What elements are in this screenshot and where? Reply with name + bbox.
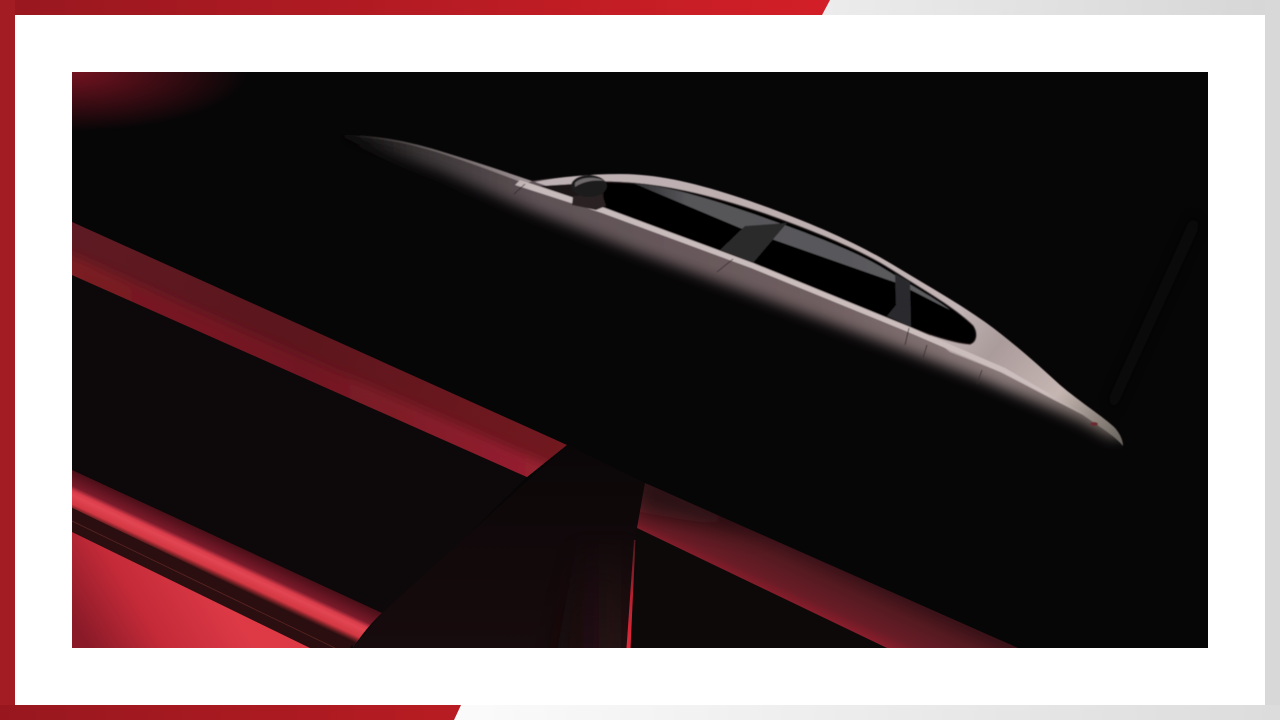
band shadow near pillar — [639, 483, 748, 537]
upper red band — [72, 222, 567, 477]
red floor — [72, 532, 310, 648]
belt line strip — [514, 180, 1049, 395]
central dark pillar — [354, 520, 638, 648]
window glass — [603, 182, 976, 344]
mirror stalk — [572, 194, 606, 210]
frame: top grey bar — [820, 0, 1280, 15]
roof rail — [535, 173, 961, 312]
lower left dark ledge — [72, 508, 353, 648]
frame: bottom grey bar — [450, 705, 1280, 720]
lower right red band — [637, 483, 1018, 648]
frame: right grey bar — [1265, 0, 1280, 720]
tail deck highlight — [346, 136, 532, 184]
mirror housing — [571, 175, 607, 197]
frame: bottom red bar — [0, 705, 461, 720]
door shut lines — [514, 184, 982, 384]
window top reflection — [633, 183, 950, 310]
lower dark wall — [72, 275, 527, 648]
mirror highlight — [575, 178, 605, 187]
car shoulder fading into shadow — [340, 110, 1140, 438]
ledge thin line — [72, 521, 335, 648]
photo dark background — [72, 72, 1208, 648]
front window pillar — [720, 223, 787, 263]
rear quarter glass — [540, 184, 603, 198]
upper band light shading — [72, 252, 548, 477]
hood and front fender — [930, 306, 1123, 446]
pillar soft light — [581, 588, 631, 648]
photo panel — [60, 72, 1208, 660]
car silhouette — [354, 136, 1124, 446]
distant right shadow — [1108, 215, 1200, 412]
mirror — [571, 175, 607, 210]
frame: top red bar — [0, 0, 830, 15]
right lower wall — [632, 528, 887, 648]
lower left lit stripe — [72, 470, 382, 648]
rear window pillar — [887, 274, 911, 327]
front headlight — [1090, 422, 1098, 426]
frame: left red bar — [0, 0, 15, 720]
red light slit — [626, 540, 636, 648]
top-left red glow — [72, 72, 234, 126]
